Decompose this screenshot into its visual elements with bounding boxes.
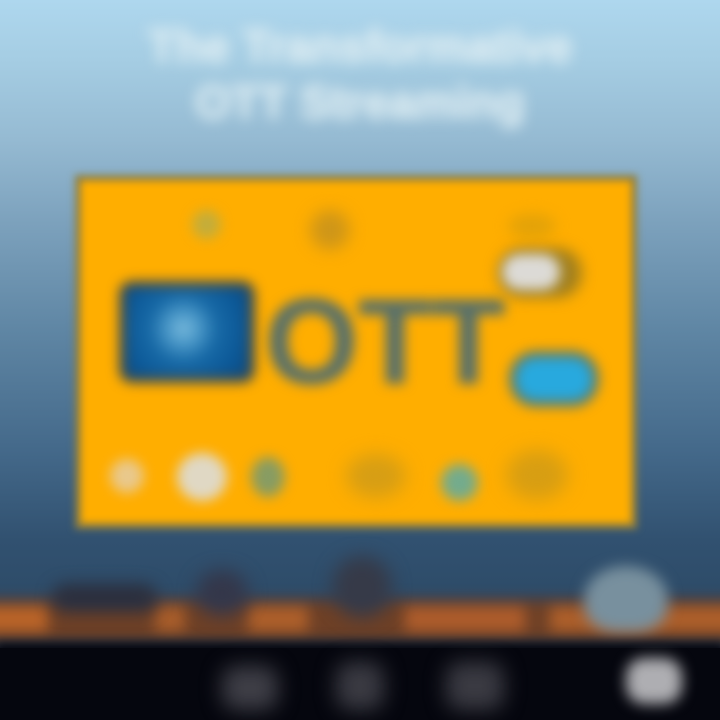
title [146,20,576,134]
panel: main yellow screen [69,169,643,534]
icon: blue TV screen [126,288,248,376]
icon: white bubble core [502,254,560,290]
panel: orange ground band [0,592,720,645]
icon: top right faint mark [508,214,556,238]
silhouette: audience left [52,584,157,612]
band highlight 4 [405,606,525,632]
icon: bottom row 5 [441,464,478,501]
footer item 1 [222,666,278,710]
footer item 2 [336,662,384,710]
icon: blue pill button [516,358,592,400]
icon: top centre circle [310,210,350,250]
band base [0,600,720,642]
icon: bottom row 3 [251,457,285,497]
icon: white speech bubble [498,248,582,298]
icon: bottom row 6 [506,450,568,500]
panel background [81,181,631,523]
panel: black footer [0,648,720,720]
band highlight 2 [155,606,185,632]
band highlight 1 [0,606,48,632]
OTT logo text: OTT [265,275,505,409]
icon: bottom row 4 [346,454,406,498]
silhouette: light dome [584,566,668,632]
footer item 3 [446,662,504,710]
footer item 4: bright icon [626,658,682,704]
title: The Transformative [148,20,572,72]
band highlight 3 [248,606,308,632]
band highlight 5 [550,606,720,632]
icon: bottom row 2 [177,453,227,501]
icon: bottom row 1 [110,459,144,493]
title: OTT Streaming [195,76,525,128]
silhouette: audience centre left [196,570,248,616]
silhouette: audience centre [332,556,392,618]
icon: top left circle [192,210,221,239]
